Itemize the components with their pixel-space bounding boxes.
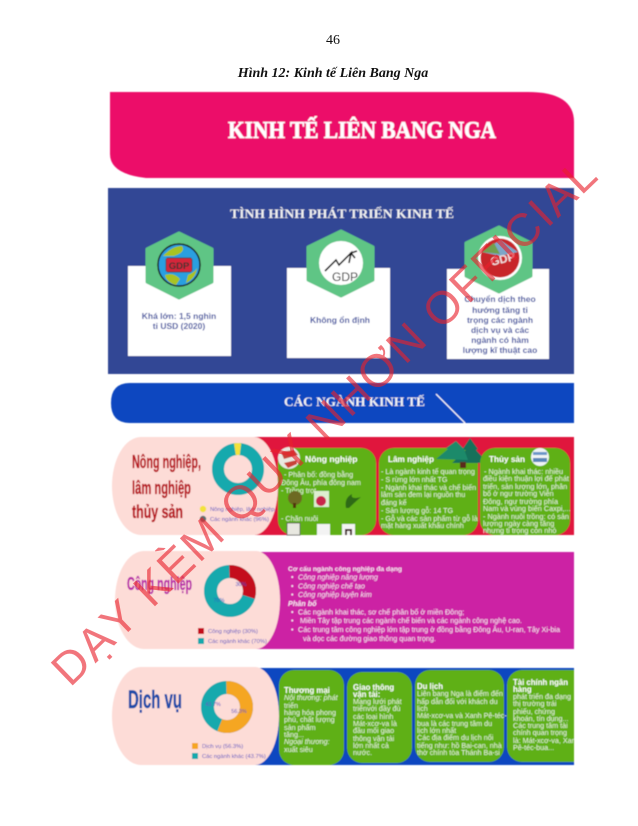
title banner: KINH TẾ LIÊN BANG NGA (228, 117, 497, 144)
card: fishery: - Ngành nuôi trồng: có sản (483, 512, 569, 521)
legend: Các ngành khác (96%) (210, 517, 269, 523)
industry text: • (291, 608, 294, 616)
card: forestry: - Sản lượng gỗ: 14 TG (381, 506, 454, 515)
industry text: • (291, 616, 294, 625)
card: size: Khá lớn: 1,5 nghìn (142, 311, 216, 321)
legend: Nông nghiệp, lâm nghiệp, (210, 507, 276, 513)
card: finance (506, 669, 575, 763)
watermark: DẠY KÈM QUY NHƠN OFFICIAL (41, 148, 607, 695)
card: tourism: Mát-xcơ-va và Xanh Pê-téc- (417, 711, 507, 720)
card: fishery: lượng ngày càng tăng (483, 519, 554, 528)
industry text: • (291, 572, 294, 582)
heading: Nông nghiệp, (132, 451, 201, 472)
donut chart (218, 449, 258, 489)
title banner (110, 92, 574, 178)
card: structural shift (447, 227, 549, 359)
card: stability: GDP (332, 270, 358, 284)
industry text: Công nghiệp luyện kim (298, 590, 372, 599)
legend (192, 743, 266, 760)
card: transport: đầu mối giao (353, 726, 394, 735)
card: finance: Các trung tâm tài (513, 721, 568, 730)
card: trade: Nội thương: phát (284, 693, 339, 702)
industry text: • (291, 625, 294, 634)
card: finance: Tài chính ngân (513, 678, 568, 687)
card: forestry: - Ngành khai thác và chế biến (381, 483, 476, 492)
panel: agriculture forestry fishery (112, 437, 574, 535)
card: finance: phát triển đa dạng (513, 692, 571, 701)
heading: Công nghiệp (127, 573, 192, 594)
heading: thủy sản (132, 501, 183, 522)
card: tourism: Các địa điểm du lịch nổi (417, 733, 494, 742)
legend: Công nghiệp (30%) (208, 629, 258, 635)
card: transport: các loại hình (353, 712, 393, 721)
industry text: Các trung tâm công nghiệp lớn tập trung ở đồng bằng Đông Âu, U-ran, Tây Xi-bia (298, 625, 561, 634)
industry text: Miền Tây tập trung các ngành chế biến và các ngành công nghệ cao. (300, 616, 522, 625)
card: size (128, 233, 231, 356)
card: stability: Không ổn định (310, 315, 370, 325)
legend (198, 628, 267, 645)
card: finance: thị trường trái (513, 699, 557, 708)
donut chart: 30% (235, 582, 247, 588)
section band (111, 383, 574, 423)
card: trade: xuất siêu (284, 745, 313, 754)
card: trade: tăng... (284, 730, 304, 739)
card: structural shift: ngành có hàm (471, 335, 529, 345)
card: tourism: lịch lớn nhất (417, 726, 456, 735)
industry text: • (291, 590, 294, 599)
card: agriculture: - Trồng trọt (281, 486, 316, 495)
section band: CÁC NGÀNH KINH TẾ (284, 394, 425, 409)
card: tourism: bua là các trung tâm du (417, 719, 492, 728)
card: finance: là: Mát-xcơ-va, Xanh (513, 736, 580, 745)
card: forestry: - Là ngành kinh tế quan trọng (381, 467, 475, 476)
card: forestry: Lâm nghiệp (388, 455, 434, 464)
card: agriculture: Nông nghiệp (305, 454, 358, 464)
card: structural shift: trọng các ngành (467, 315, 533, 325)
card: transport: triểnvới đầy đủ (353, 704, 400, 713)
heading (132, 451, 201, 522)
card: transport: Giao thông (353, 683, 394, 692)
industry text: Công nghiệp chế tạo (298, 582, 365, 590)
legend: Các ngành khác (43.7%) (202, 754, 266, 760)
card: fishery: triển, sản lượng lớn, phân (483, 482, 567, 491)
card: tourism (415, 670, 507, 762)
card: agriculture: - Phân bố: đồng bằng (284, 470, 353, 479)
card: finance: phiếu, chứng (513, 707, 555, 716)
card: forestry: mặt hàng xuất khẩu chính (381, 521, 464, 530)
card: transport (347, 672, 412, 763)
donut chart: 56.3% (231, 709, 247, 715)
card: structural shift: hướng tăng tỉ (472, 305, 528, 315)
card: size: GDP (169, 261, 190, 272)
panel: economic development (108, 188, 574, 374)
donut chart (205, 688, 247, 726)
card: stability (287, 231, 390, 358)
figure caption: Hình 12: Kinh tế Liên Bang Nga (237, 66, 428, 81)
card: fishery: điều kiện thuận lợi để phát (483, 474, 569, 483)
card: fishery: Đông, ngư trường phía (483, 497, 559, 506)
legend: Các ngành khác (70%) (208, 639, 267, 645)
card: fishery: bố ở ngư trường Viễn (483, 489, 554, 498)
industry text: Công nghiệp năng lượng (298, 572, 378, 582)
donut chart: 70% (213, 598, 225, 604)
card: trade: phú, chất lượng (284, 715, 335, 724)
card: fishery: Thủy sản (489, 455, 525, 464)
card: fishery: - Ngành khai thác: nhiều (484, 467, 563, 476)
card: forestry: lâm sản đem lại nguồn thu (381, 490, 465, 499)
card: forestry: đáng kể (381, 498, 407, 507)
card: transport: vận tải: (353, 690, 380, 699)
card: transport: Mạng lưới phát (353, 697, 402, 706)
heading: lâm nghiệp (132, 477, 191, 498)
industry text: và dọc các đường giao thông quan trọng. (303, 634, 436, 643)
card: fishery (480, 448, 571, 535)
card: transport: lớn nhất cả (353, 741, 389, 750)
card: tourism: Du lịch (417, 682, 443, 691)
card: structural shift: Chuyển dịch theo (464, 294, 536, 304)
panel: industry (115, 551, 574, 649)
card: agriculture: - Chăn nuôi (281, 514, 319, 523)
heading: Dịch vụ (128, 686, 182, 714)
industry text: Phân bố (288, 599, 317, 608)
page number: 46 (326, 33, 340, 48)
card: tourism: lịch (417, 704, 428, 713)
card: tourism: Liên bang Nga là điểm đến (417, 689, 503, 698)
card: finance: chính quan trọng (513, 728, 567, 737)
card: structural shift: GDP (489, 251, 517, 269)
card: tourism: tiếng như: hồ Bai-can, nhà (417, 741, 502, 750)
card: tourism: thờ chính tòa Thánh Ba-si (417, 748, 500, 757)
legend: Dịch vụ (56.3%) (202, 744, 243, 750)
card: forestry: - S rừng lớn nhất TG (381, 475, 448, 484)
card: trade: triển (284, 701, 298, 710)
industry text (288, 565, 561, 643)
donut chart (210, 572, 250, 610)
card: finance: khoán, tín dụng... (513, 714, 569, 723)
card: transport: Mát-xcơ-va là (353, 719, 397, 728)
card: size: tỉ USD (2020) (153, 321, 205, 331)
panel: services (112, 667, 587, 765)
industry text: Các ngành khai thác, sơ chế phân bố ở miền Đông; (298, 608, 464, 616)
donut chart: 43.7% (205, 702, 221, 708)
card: agriculture: Đông Âu, phía đông nam (281, 478, 361, 487)
industry text: • (291, 582, 294, 590)
card: trade: Thương mại (284, 686, 330, 695)
card: tourism: hấp dẫn đối với khách du (417, 697, 498, 706)
infographic (108, 92, 587, 765)
card: fishery: Nam và vùng biển Caxpi,... (483, 504, 571, 513)
card: structural shift: lượng kĩ thuật cao (463, 345, 537, 355)
card: forestry: - Gỗ và các sản phẩm từ gỗ là (381, 514, 478, 523)
card: agriculture (278, 447, 376, 535)
card: trade: Ngoại thương: (284, 737, 330, 746)
card: trade: sản phẩm (284, 723, 316, 732)
card: finance: hàng (513, 685, 532, 694)
card: transport: nước. (353, 748, 372, 757)
industry text: Cơ cấu ngành công nghiệp đa dạng (288, 565, 402, 573)
card: transport: thông vận tải (353, 734, 395, 743)
legend (200, 506, 276, 523)
card: structural shift: dịch vụ và các (471, 325, 529, 335)
card: forestry (379, 438, 488, 535)
card: fishery: nhưng tỉ trọng còn nhỏ (483, 526, 556, 535)
card: trade: hàng hóa phong (284, 708, 336, 717)
card: trade (279, 670, 344, 765)
panel heading: TÌNH HÌNH PHÁT TRIỂN KINH TẾ (230, 206, 454, 221)
card: finance: Pê-téc-bua... (513, 743, 554, 752)
